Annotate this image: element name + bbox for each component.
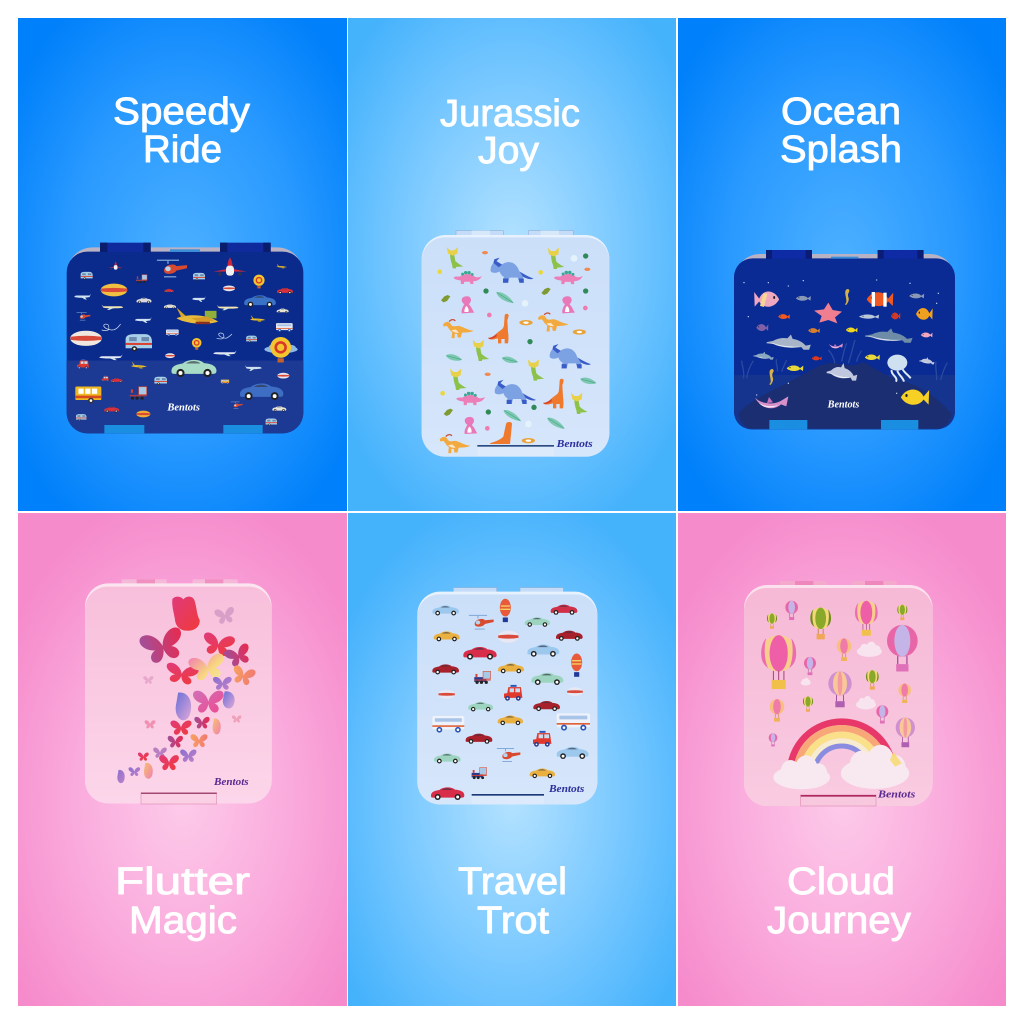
panel: Ocean Splash xyxy=(678,18,1006,511)
panel: Speedy Ride xyxy=(18,18,347,511)
heading: Cloud Journey: Cloud xyxy=(787,861,895,903)
heading: Jurassic Joy xyxy=(440,93,580,172)
heading: Ocean Splash: Splash xyxy=(780,129,902,171)
logo: Bentots xyxy=(827,399,859,410)
heading: Cloud Journey: Journey xyxy=(767,900,911,942)
logo: Bentots xyxy=(166,403,200,414)
logo: Bentots xyxy=(556,439,593,450)
heading: Jurassic Joy: Jurassic xyxy=(440,93,580,135)
heading: Travel Trot: Travel xyxy=(458,861,567,903)
starfish xyxy=(814,303,842,323)
lunch box: vehicles on navy xyxy=(67,243,303,433)
lunch box: dinosaurs on pale blue xyxy=(422,231,609,457)
logo: Bentots xyxy=(877,789,915,800)
logo: Bentots xyxy=(548,784,584,795)
clouds over rainbow xyxy=(773,745,909,789)
lunch box: cars on pale blue xyxy=(417,588,597,804)
heading: Ocean Splash: Ocean xyxy=(781,91,901,133)
heading: Cloud Journey xyxy=(767,861,911,942)
heading: Travel Trot: Trot xyxy=(477,900,549,942)
panel: Jurassic Joy xyxy=(348,18,676,511)
jellyfish xyxy=(887,355,911,382)
heading: Flutter Magic: Magic xyxy=(129,900,237,942)
heading: Jurassic Joy: Joy xyxy=(478,130,539,172)
panel: Cloud Journey xyxy=(678,513,1006,1006)
heading: Speedy Ride xyxy=(113,91,250,171)
rainbow xyxy=(790,722,893,773)
heading: Ocean Splash xyxy=(780,91,902,171)
logo: Bentots xyxy=(213,777,249,788)
heading: Speedy Ride: Speedy xyxy=(113,91,250,133)
heading: Speedy Ride: Ride xyxy=(143,129,222,171)
lunch box: butterflies on pink xyxy=(85,579,272,804)
heading: Flutter Magic: Flutter xyxy=(115,861,250,903)
heading: Flutter Magic xyxy=(115,861,250,942)
lunch box: sea creatures on deep blue xyxy=(734,250,955,429)
panel: Travel Trot xyxy=(348,513,676,1006)
heading: Travel Trot xyxy=(458,861,567,942)
panel: Flutter Magic xyxy=(18,513,347,1006)
lunch box: hot air balloons and rainbow xyxy=(744,581,933,806)
